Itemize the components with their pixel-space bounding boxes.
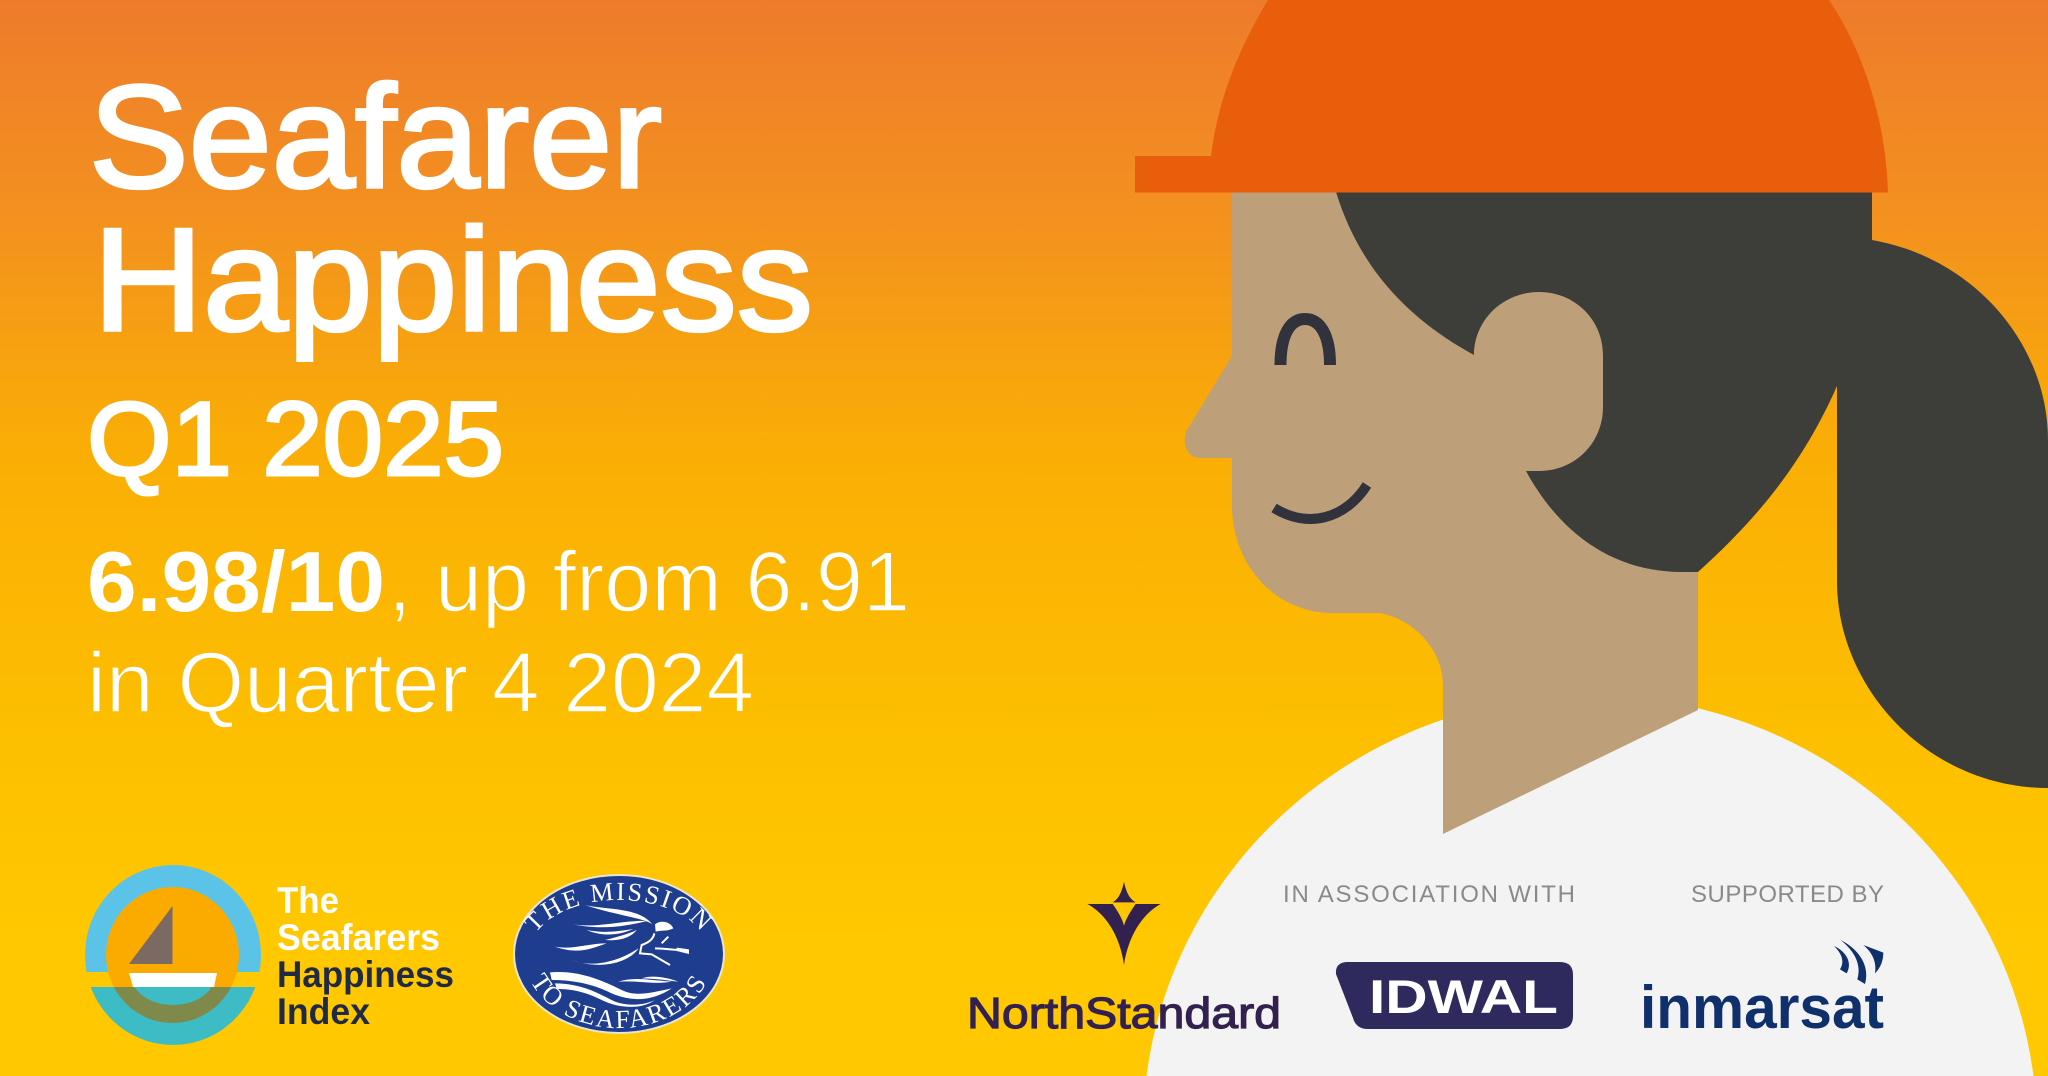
shirt <box>1146 695 2034 1076</box>
title: Seafarer <box>89 55 662 218</box>
illustration: seafarer in hard hat <box>1135 0 2048 1076</box>
hard hat <box>1135 0 1888 192</box>
score text: 6.98/10 <box>87 535 385 630</box>
label: supported by: SUPPORTED BY <box>1691 881 1884 908</box>
title <box>89 55 813 361</box>
score text: , up from 6.91 <box>388 535 910 630</box>
subtitle: quarter: Q1 2025 <box>87 381 504 498</box>
title: Happiness <box>93 198 813 361</box>
wordmark <box>277 880 454 1032</box>
icon: sailboat sun <box>85 865 261 1045</box>
angel and waves emblem <box>550 905 689 1007</box>
score text: in Quarter 4 2024 <box>87 636 754 731</box>
face and neck <box>1185 192 1698 834</box>
logo: NorthStandard <box>967 882 1281 1038</box>
hair and ponytail <box>1336 192 2048 788</box>
score text <box>87 535 910 731</box>
wordmark: Seafarers <box>277 917 440 958</box>
wordmark: Happiness <box>277 954 454 995</box>
label: in association with: IN ASSOCIATION WITH <box>1283 881 1575 908</box>
eye <box>1280 319 1330 365</box>
logo: The Mission to Seafarers: TO SEAFARERS <box>532 972 704 1028</box>
logo: IDWAL <box>1336 962 1573 1029</box>
icon: signal arcs <box>1834 940 1883 984</box>
icon: star <box>1087 882 1161 965</box>
logo: NorthStandard: NorthStandard <box>967 989 1281 1038</box>
logo: The Mission to Seafarers: THE MISSION <box>523 882 713 930</box>
wordmark: The <box>277 880 339 921</box>
logo: inmarsat: inmarsat <box>1640 974 1884 1041</box>
logo: inmarsat <box>1640 940 1884 1041</box>
logo: IDWAL: IDWAL <box>1369 970 1558 1023</box>
ear <box>1465 292 1603 471</box>
wordmark: Index <box>277 991 370 1032</box>
logo: The Mission to Seafarers <box>513 874 725 1034</box>
smile <box>1274 485 1367 519</box>
logo: The Seafarers Happiness Index <box>85 865 454 1045</box>
